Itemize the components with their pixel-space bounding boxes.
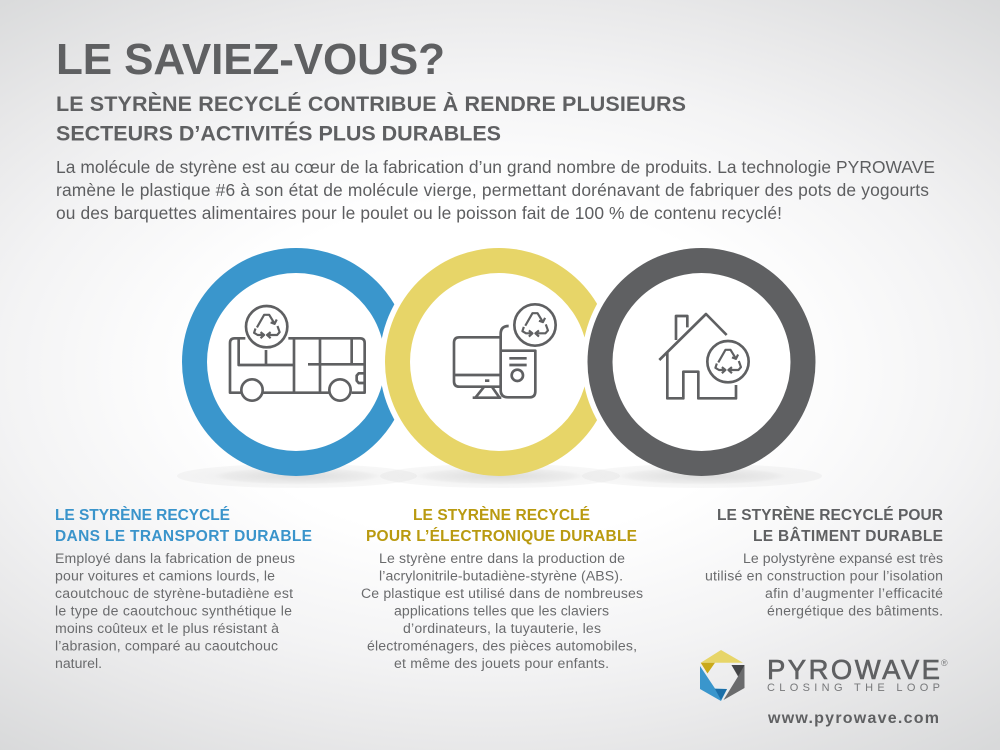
logo wordmark: ® [941, 658, 948, 668]
text: transport: pour voitures et camions lourds, le [55, 568, 275, 584]
panel: transport [55, 507, 312, 671]
intro paragraph: ramène le plastique #6 à son état de molécule vierge, permettant dorénavant de fabriquer des pots de yogourts [56, 180, 929, 200]
icon: computer with recycling symbol [454, 304, 556, 398]
text: building: utilisé en construction pour l’isolation [705, 568, 943, 584]
website url: www.pyrowave.com [767, 710, 939, 727]
subtitle: LE STYRÈNE RECYCLÉ CONTRIBUE À RENDRE PLUSIEURS [56, 91, 686, 116]
text: electronics: Le styrène entre dans la production de [379, 550, 625, 566]
text: building [705, 550, 943, 618]
text: electronics: d’ordinateurs, la tuyauterie, les [403, 620, 601, 636]
intro paragraph: La molécule de styrène est au cœur de la fabrication d’un grand nombre de produits. La technologie PYROWAVE [56, 157, 935, 177]
panel: electronics [361, 507, 643, 671]
text: transport: le type de caoutchouc synthétique le [55, 602, 292, 618]
text: electronics: et même des jouets pour enfants. [394, 655, 609, 671]
heading: building: LE BÂTIMENT DURABLE [753, 527, 943, 545]
text: transport: moins coûteux et le plus résistant à [55, 620, 279, 636]
heading: electronics [366, 507, 637, 545]
intro paragraph [56, 157, 935, 223]
text: transport: naturel. [55, 655, 102, 671]
panel: building [705, 507, 943, 618]
icon: bus with recycling symbol [230, 306, 365, 401]
text: transport: Employé dans la fabrication de pneus [55, 550, 295, 566]
subtitle [56, 91, 686, 146]
text: transport: l’abrasion, comparé au caoutchouc [55, 638, 278, 654]
text: building: énergétique des bâtiments. [767, 602, 943, 618]
text: building: afin d’augmenter l’efficacité [765, 585, 943, 601]
circle: building ring [588, 248, 816, 476]
text: building: Le polystyrène expansé est très [743, 550, 943, 566]
circle shadows [177, 464, 822, 488]
intro paragraph: ou des barquettes alimentaires pour le poulet ou le poisson fait de 100 % de contenu recyclé! [56, 203, 782, 223]
heading: electronics: POUR L’ÉLECTRONIQUE DURABLE [366, 528, 637, 545]
text: electronics: Ce plastique est utilisé dans de nombreuses [361, 585, 643, 601]
logo wordmark: PYROWAVE [767, 654, 940, 685]
heading: transport: DANS LE TRANSPORT DURABLE [55, 528, 312, 545]
heading: transport [55, 507, 312, 545]
text: transport [55, 550, 295, 671]
circle: electronics ring [385, 248, 613, 476]
text: transport: caoutchouc de styrène-butadiène est [55, 585, 293, 601]
text: electronics: applications telles que les claviers [394, 602, 609, 618]
logo wordmark: CLOSING THE LOOP [767, 682, 940, 694]
heading: building [717, 507, 943, 545]
logo mark: hexagon [700, 650, 744, 701]
heading: building: LE STYRÈNE RECYCLÉ POUR [717, 507, 943, 524]
icon: house with recycling symbol [659, 314, 749, 398]
subtitle: SECTEURS D’ACTIVITÉS PLUS DURABLES [56, 120, 501, 146]
text: electronics [361, 550, 643, 671]
heading: electronics: LE STYRÈNE RECYCLÉ [413, 507, 590, 524]
text: electronics: l’acrylonitrile-butadiène-styrène (ABS). [379, 568, 623, 584]
title: LE SAVIEZ-VOUS? [56, 35, 445, 84]
circle: transport ring [182, 248, 410, 476]
text: electronics: électroménagers, des pièces automobiles, [367, 638, 637, 654]
heading: transport: LE STYRÈNE RECYCLÉ [55, 507, 230, 524]
